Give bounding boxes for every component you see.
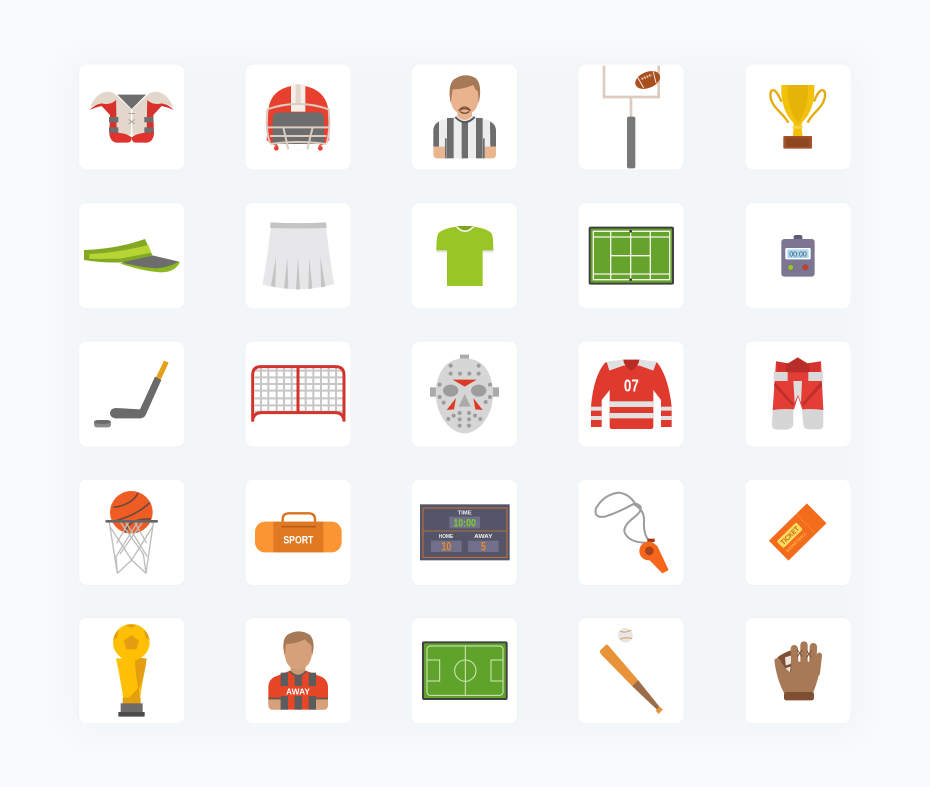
- card: scoreboard: [411, 479, 517, 585]
- icon: hockey stick and puck: [94, 361, 169, 427]
- card: whistle: [578, 479, 684, 585]
- card: trophy: [745, 64, 851, 170]
- icon: scoreboard: 10: [441, 540, 452, 554]
- icon: soccer trophy: [113, 624, 150, 717]
- icon: goalie mask: [430, 355, 499, 433]
- card: referee: [411, 64, 517, 170]
- card: sport bag: [245, 479, 351, 585]
- icon: sun visor: [84, 239, 180, 272]
- card: skirt: [245, 203, 351, 309]
- icon: golden trophy: [770, 85, 825, 149]
- icon: football helmet: [267, 84, 329, 151]
- icon: scoreboard: 5: [481, 540, 486, 554]
- icon: scoreboard: TIME: [458, 511, 472, 517]
- icon: goal post and football: [604, 66, 663, 168]
- icon: tennis skirt: [262, 222, 334, 289]
- icon: scoreboard: [420, 504, 510, 560]
- card: baseball bat: [578, 618, 684, 724]
- icon: hockey pants: [772, 357, 823, 430]
- icon: scoreboard: HOME: [439, 534, 453, 540]
- card: t-shirt: [411, 203, 517, 309]
- icon: hockey goal net: [253, 367, 344, 422]
- card: soccer player: [245, 618, 351, 724]
- icon: basketball and hoop: [107, 491, 157, 573]
- icon: scoreboard: AWAY: [474, 534, 493, 540]
- card: goal post: [578, 64, 684, 170]
- icon: whistle on lanyard: [596, 493, 669, 573]
- card: shoulder pads: [79, 64, 185, 170]
- icon: sports ticket: [769, 503, 826, 561]
- card: stopwatch: [745, 203, 851, 309]
- card: soccer field: [411, 618, 517, 724]
- card: hockey jersey: [578, 341, 684, 447]
- card: baseball glove: [745, 618, 851, 724]
- icon: digital stopwatch: 00:00: [789, 251, 807, 258]
- card: basketball hoop: [79, 479, 185, 585]
- icon: hockey jersey: 07: [624, 375, 639, 395]
- icon: referee: [433, 75, 496, 158]
- card: world cup trophy: [79, 618, 185, 724]
- card: hockey stick: [79, 341, 185, 447]
- icon: soccer field: [422, 641, 508, 700]
- card: hockey pants: [745, 341, 851, 447]
- icon: baseball glove: [774, 645, 822, 700]
- card: tennis court: [578, 203, 684, 309]
- card: sun visor: [79, 203, 185, 309]
- card: hockey net: [245, 341, 351, 447]
- icon: sport duffel bag: SPORT: [283, 534, 313, 546]
- icon: sports ticket: TICKET: [780, 525, 801, 546]
- icon: baseball and bat: [600, 628, 663, 714]
- icon: sports ticket: BASKETBALL: [785, 531, 808, 553]
- icon: green t-shirt: [436, 226, 493, 286]
- card: goalie mask: [411, 341, 517, 447]
- icon: shoulder pads: [89, 92, 174, 143]
- card: football helmet: [245, 64, 351, 170]
- icon: soccer player in away shirt: AWAY: [286, 686, 310, 696]
- icon: tennis court: [589, 227, 674, 285]
- card: ticket: [745, 479, 851, 585]
- icon: scoreboard: 10:00: [453, 518, 476, 530]
